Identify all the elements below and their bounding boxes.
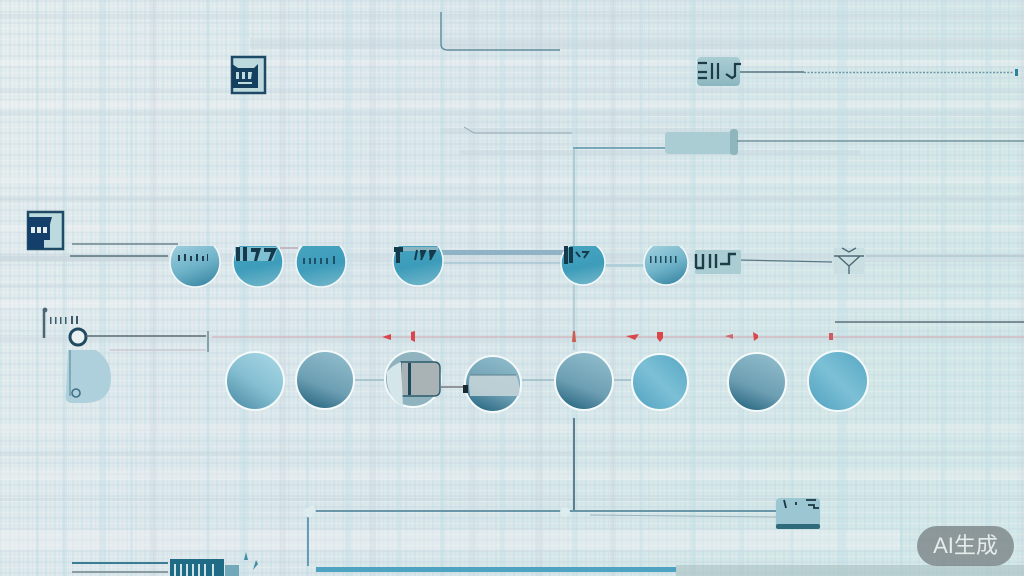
- label: row 1 right tag: [695, 250, 741, 274]
- line: gauge connector: [86, 331, 209, 352]
- bottom connector: [303, 505, 776, 566]
- row 1 circle 2: [232, 246, 284, 288]
- row 2 connectors: [355, 380, 632, 387]
- bottom left element: [72, 552, 258, 576]
- badge: AI generated: [917, 526, 1014, 566]
- vertical trunk line: [573, 148, 575, 510]
- line: second right connector: [573, 141, 1024, 148]
- label: top right tag: [697, 57, 741, 86]
- icon: top left box: [232, 57, 265, 93]
- top connector: [441, 12, 560, 50]
- icon: row 1 far right funnel: [834, 248, 864, 274]
- row 2 circle 3 with square icon: [385, 351, 441, 407]
- bottom bar: [316, 567, 676, 572]
- row 1 circle 1: [169, 246, 221, 288]
- timeline with red markers: [212, 322, 1024, 342]
- row 2 circle 4 with panel: [463, 356, 521, 412]
- row 2 circle 1: [226, 352, 284, 410]
- faint diagonal connector: [464, 127, 572, 133]
- label: bottom right tag: [776, 498, 820, 529]
- label: second right tag: [665, 129, 738, 155]
- row 1 circle 3: [295, 246, 347, 288]
- icon: left gauge figure: [43, 308, 111, 403]
- row 2 circle 2: [296, 351, 354, 409]
- row 2 circle 5: [555, 352, 613, 410]
- row 2 circle 8: [808, 351, 868, 411]
- icon: left box: [28, 212, 63, 249]
- lines: left connectors: [70, 244, 178, 256]
- row 2 circle 6: [632, 354, 688, 410]
- row 1 circle 5: [561, 241, 605, 285]
- row 1 connectors: [280, 248, 1024, 267]
- badge: AI generated: AI生成: [933, 533, 998, 558]
- line: top right connector: [740, 69, 1018, 76]
- row 1 circle 4: [392, 246, 444, 287]
- row 1 circle 6: [644, 241, 688, 285]
- row 2 circle 7: [728, 353, 786, 411]
